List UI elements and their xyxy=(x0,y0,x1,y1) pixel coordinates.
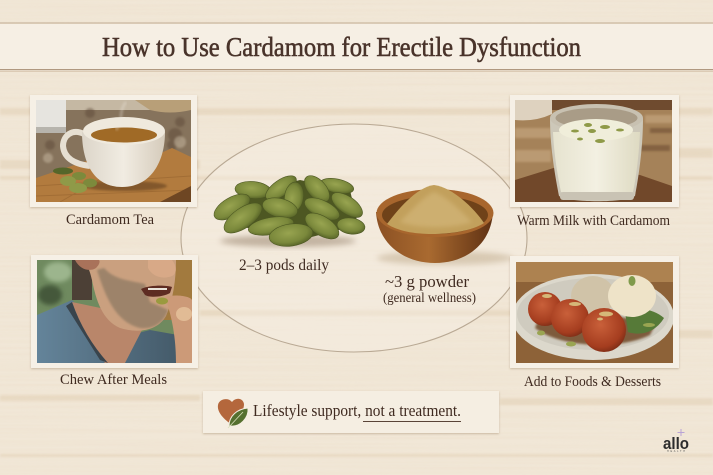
photo: plate of sweets xyxy=(512,262,674,363)
photo: man chewing xyxy=(37,260,192,363)
icon: heart and leaf xyxy=(218,399,248,428)
callout banner xyxy=(203,391,499,433)
title band xyxy=(0,22,713,72)
logo: allo health: HEALTH xyxy=(667,450,685,453)
label: warm milk: Warm Milk with Cardamom xyxy=(517,213,671,229)
wooden bowl with powder xyxy=(376,185,513,265)
logo: allo health: allo xyxy=(663,434,689,453)
cardamom pods xyxy=(210,171,367,249)
panel: chew after meals xyxy=(31,255,198,368)
panel: cardamom tea xyxy=(30,95,197,207)
panel: warm milk xyxy=(510,95,679,207)
photo: glass of milk xyxy=(515,100,672,202)
label: cardamom tea: Cardamom Tea xyxy=(66,212,155,228)
powder caption: ~3 g powder xyxy=(385,272,469,291)
panel: foods and desserts xyxy=(510,256,679,368)
oval panel xyxy=(181,124,527,352)
label: chew after meals: Chew After Meals xyxy=(60,372,167,388)
label: foods and desserts: Add to Foods & Desserts xyxy=(524,374,661,390)
title: How to Use Cardamom for Erectile Dysfunction xyxy=(102,32,581,62)
photo: tea cup xyxy=(36,100,191,202)
powder caption: (general wellness) xyxy=(383,290,476,305)
callout text: Lifestyle support, not a treatment. xyxy=(253,401,461,420)
pods caption: 2–3 pods daily xyxy=(239,257,329,274)
powder caption xyxy=(383,272,476,305)
